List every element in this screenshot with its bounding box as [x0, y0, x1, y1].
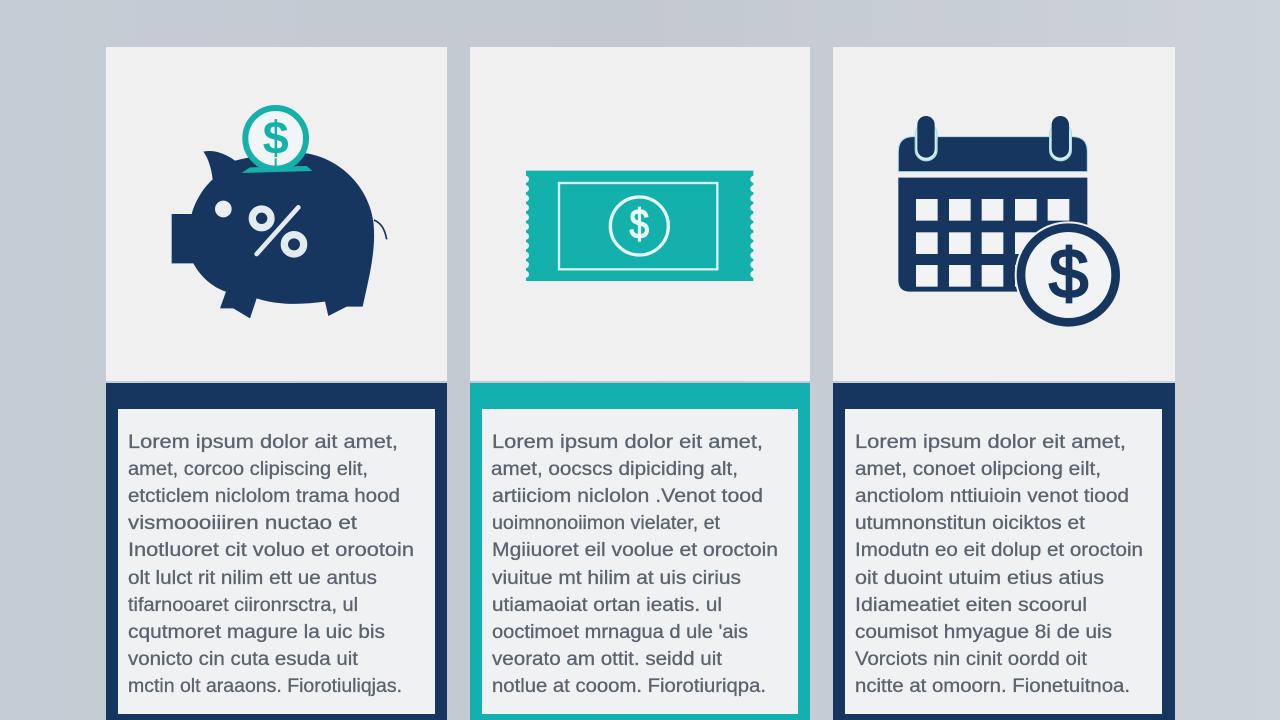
icon: calendar with dollar coin: $ [1049, 235, 1088, 313]
text block: right card body: Lorem ipsum dolor eit amet, [855, 432, 1126, 453]
text block: left card body [128, 432, 414, 697]
text block: right card body: Imodutn eo eit dolup et oroctoin [855, 540, 1143, 561]
text block: middle card body: uoimnonoiimon vielater, et [492, 513, 721, 534]
text block: left card body: Lorem ipsum dolor ait amet, [128, 432, 398, 453]
text block: right card body: oit duoint utuim etius atius [855, 568, 1104, 589]
icon: piggy bank with coin: $ [263, 111, 289, 163]
text block: right card body: Vorciots nin cinit oordd oit [855, 649, 1088, 670]
panel: piggy bank card [106, 47, 447, 720]
text block: right card body: ncitte at omoorn. Fionetuitnoa. [855, 676, 1130, 697]
text block: middle card body: Mgiiuoret eil voolue et oroctoin [492, 540, 778, 561]
text block: middle card body: amet, oocscs dipiciding alt, [491, 459, 738, 480]
text block: left card body: cqutmoret magure la uic bis [128, 622, 385, 643]
text block: left card body: Inotluoret cit voluo et orootoin [128, 540, 414, 561]
text block: left card body: mctin olt araaons. Fiorotiuliqjas. [128, 676, 402, 697]
text block: middle card body: ooctimoet mrnagua d ule 'ais [492, 622, 748, 643]
text block: right card body [855, 432, 1143, 697]
text block: left card body: etcticlem niclolom trama hood [128, 486, 400, 507]
text block: middle card body: Lorem ipsum dolor eit amet, [492, 432, 763, 453]
text block: middle card body: artiiciom niclolon .Venot tood [492, 486, 763, 507]
text block: left card body: vonicto cin cuta esuda uit [128, 649, 359, 670]
icon: banknote with dollar [522, 171, 758, 281]
text block: middle card body: notlue at cooom. Fiorotiuriqpa. [492, 676, 766, 697]
text block: right card body: anctiolom nttiuioin venot tiood [855, 486, 1129, 507]
icon: calendar with dollar coin [898, 116, 1122, 329]
text block: middle card body: viuitue mt hilim at uis cirius [492, 568, 741, 589]
text block: right card body: utumnonstitun oiciktos et [855, 513, 1086, 534]
icon: banknote with dollar: $ [630, 200, 649, 247]
text block: left card body: amet, corcoo clipiscing elit, [128, 459, 368, 480]
text block: right card body: coumisot hmyague 8i de uis [855, 622, 1112, 643]
text block: middle card body: veorato am ottit. seidd uit [492, 649, 723, 670]
text block: middle card body [491, 432, 778, 697]
text block: left card body: tifarnooaret ciironrsctra, ul [128, 595, 358, 616]
text block: left card body: olt lulct rit nilim ett ue antus [128, 568, 377, 589]
text block: right card body: amet, conoet olipciong eilt, [855, 459, 1101, 480]
text block: right card body: Idiameatiet eiten scoorul [855, 595, 1087, 616]
text block: middle card body: utiamaoiat ortan ieatis. ul [492, 595, 722, 616]
text block: left card body: vismoooiiiren nuctao et [128, 513, 358, 534]
panel: calendar card [833, 47, 1175, 720]
panel: banknote card [470, 47, 810, 720]
icon: piggy bank with coin [172, 108, 387, 318]
